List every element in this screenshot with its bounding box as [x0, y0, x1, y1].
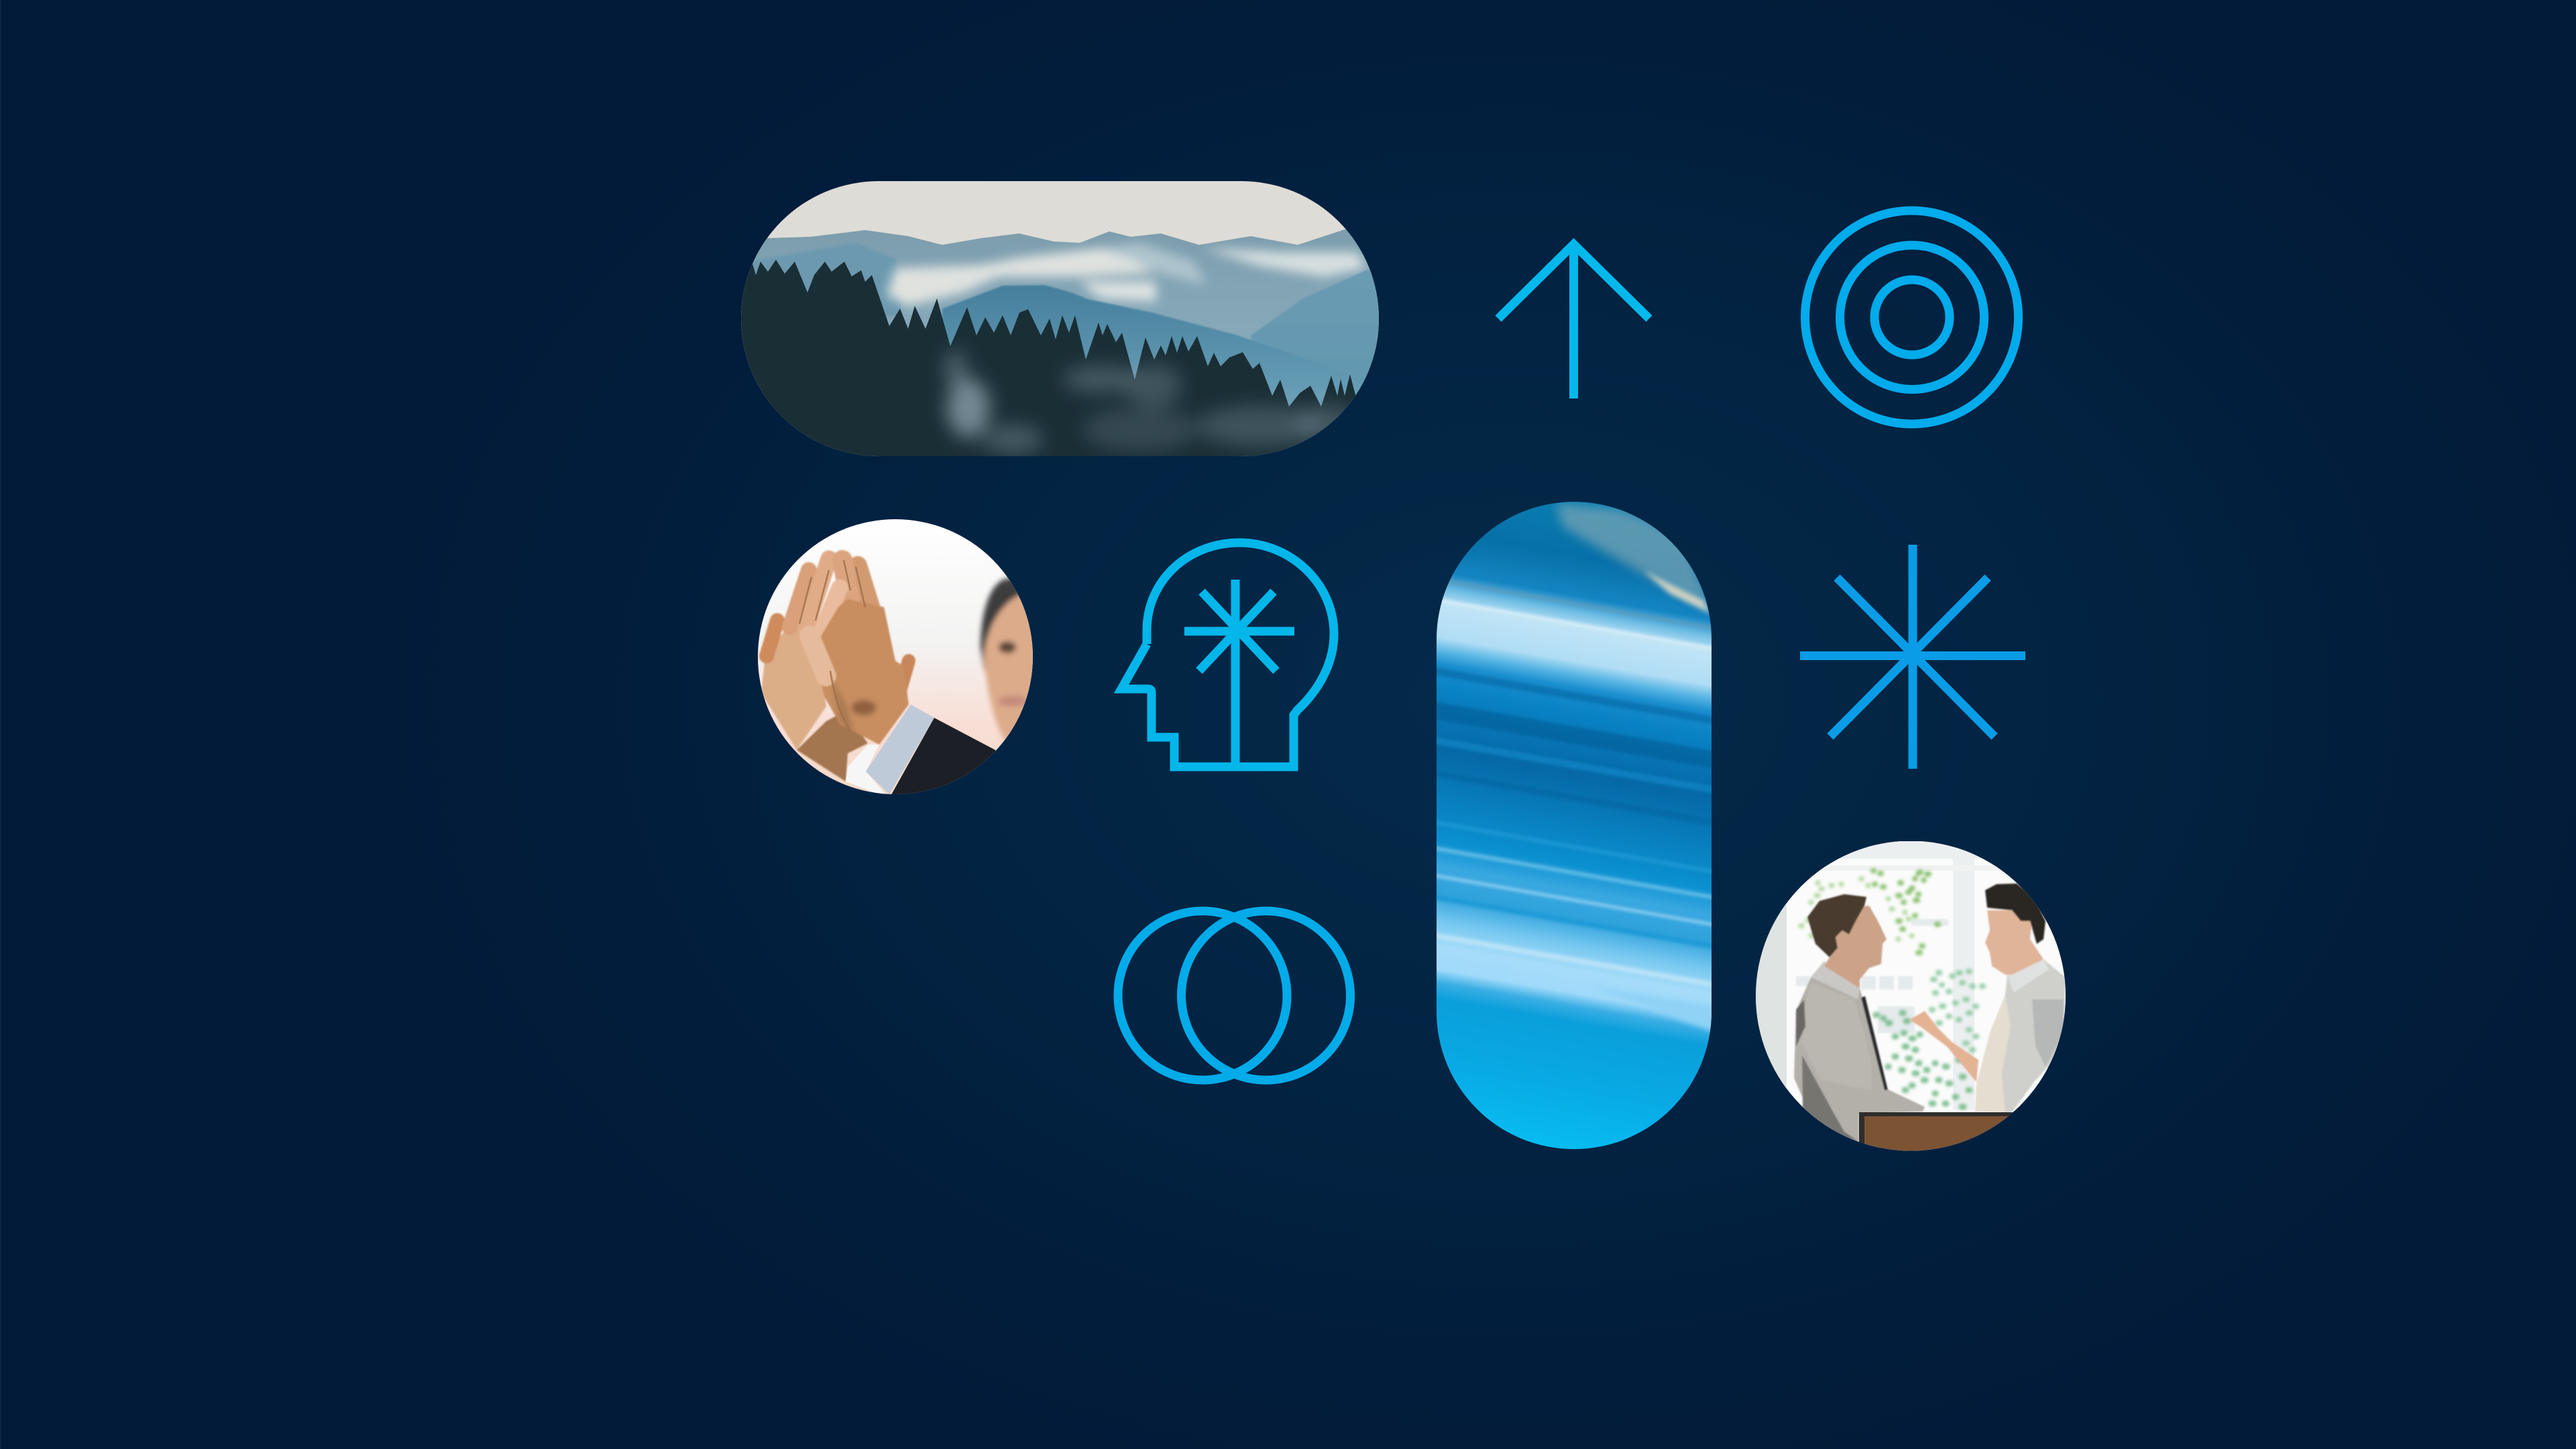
- icon: concentric target circles: [1805, 211, 2019, 424]
- icon: up arrow: [1498, 244, 1649, 398]
- photo: blue motion streaks pill: [1234, 297, 1925, 1315]
- fingers: [790, 559, 876, 631]
- right man's arm: [1909, 1011, 1978, 1082]
- head outline: [1121, 543, 1334, 767]
- photo: misty mountain forest pill: [738, 181, 1382, 460]
- clasped hands: [761, 559, 909, 782]
- photo: high-five hands circle: [758, 519, 1036, 798]
- forest silhouette: [738, 260, 1382, 460]
- wooden desk: [1859, 1114, 2020, 1161]
- fog over forest: [945, 350, 1361, 454]
- blurred woman's face: [981, 578, 1036, 745]
- right man's hair: [1985, 883, 2046, 944]
- white shirt: [846, 745, 889, 798]
- icon: head with spark: [1121, 543, 1334, 767]
- right palm: [816, 599, 909, 745]
- spark with stem: [1231, 580, 1239, 767]
- small fingers behind: [767, 621, 777, 656]
- clouds on the ridge: [887, 243, 1366, 306]
- right man's face: [1985, 910, 2043, 975]
- scattered leaves: [1801, 871, 1983, 1107]
- thumb: [809, 636, 826, 676]
- right man: [1909, 883, 2066, 1112]
- left wall: [1756, 841, 1787, 1151]
- right man's shirt: [1975, 959, 2066, 1112]
- icon: overlapping circles: [1118, 911, 1351, 1080]
- far mountain ridge: [738, 227, 1382, 402]
- left man's shirt: [1794, 961, 1925, 1142]
- shirt cuff: [866, 704, 934, 794]
- right mountain: [1251, 268, 1382, 402]
- left darker mountain: [738, 243, 902, 335]
- icon: eight-point asterisk: [1800, 545, 2025, 769]
- lower wrist: [797, 711, 868, 782]
- mid mountain ridge: [939, 285, 1382, 429]
- left man's hair: [1807, 894, 1866, 957]
- window frames: [1787, 841, 2068, 1110]
- left palm: [761, 626, 826, 750]
- tan cloud streak at top: [1556, 503, 1712, 607]
- photo: two men talking circle: [1756, 841, 2068, 1161]
- lower light band wedge: [1589, 986, 1717, 1033]
- left man's tie: [1861, 996, 1888, 1090]
- left man's face: [1824, 906, 1887, 988]
- suit sleeve: [889, 718, 1006, 798]
- left man: [1794, 894, 1925, 1142]
